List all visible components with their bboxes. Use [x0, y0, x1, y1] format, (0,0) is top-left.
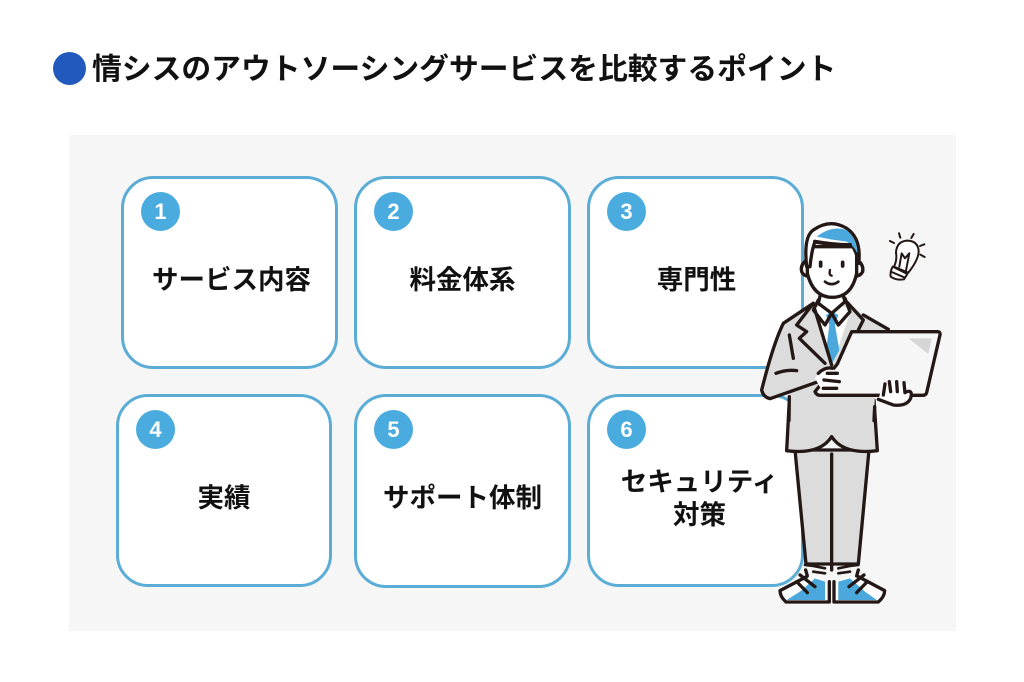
number badge 5: 5 — [387, 417, 400, 442]
label: expertise: 専門性 — [657, 265, 736, 295]
card 6: security — [587, 394, 804, 587]
panel: grey background — [69, 135, 956, 631]
card 3: expertise — [587, 176, 804, 369]
card 5: support — [354, 394, 571, 588]
card 1: service content — [121, 176, 338, 369]
label: security measures: 対策 — [673, 500, 726, 530]
card 4: track record — [116, 394, 332, 587]
number badge 3: 3 — [620, 199, 633, 224]
lapels and collar — [797, 298, 863, 365]
number badge 2 — [374, 192, 413, 231]
title: 情シスのアウトソーシングサービスを比較するポイント — [92, 53, 836, 86]
laptop — [815, 332, 940, 395]
jacket hem — [787, 400, 877, 451]
number badge 5 — [374, 410, 413, 449]
label: security measures — [621, 467, 778, 530]
right shoe — [834, 575, 885, 602]
number badge 4 — [136, 410, 175, 449]
shirt — [815, 307, 850, 367]
title bullet: blue circle — [53, 52, 86, 85]
right hand — [878, 381, 912, 405]
label: support: サポート体制 — [383, 483, 542, 513]
number badge 1 — [141, 192, 180, 231]
number badge 2: 2 — [387, 199, 400, 224]
label: service content: サービス内容 — [152, 265, 311, 295]
ears — [801, 260, 810, 276]
label: pricing: 料金体系 — [410, 265, 516, 295]
eyes, nose, mouth — [821, 262, 843, 266]
number badge 1: 1 — [154, 199, 167, 224]
card 2: pricing — [354, 176, 571, 369]
figure: upper body with laptop — [762, 224, 940, 421]
left hand — [815, 368, 839, 390]
trousers — [795, 450, 869, 564]
label: security measures: セキュリティ — [621, 467, 778, 497]
hair — [806, 224, 859, 267]
label: track record: 実績 — [198, 483, 250, 513]
number badge 6 — [607, 410, 646, 449]
neck — [818, 293, 845, 313]
face — [807, 247, 857, 297]
number badge 4: 4 — [149, 417, 162, 442]
number badge 6: 6 — [620, 417, 633, 442]
tie — [826, 312, 839, 364]
jacket and torso — [762, 300, 888, 421]
left shoe — [780, 575, 829, 602]
number badge 3 — [607, 192, 646, 231]
figure: lower body and shoes — [780, 400, 885, 602]
icon: light bulb — [890, 233, 925, 280]
